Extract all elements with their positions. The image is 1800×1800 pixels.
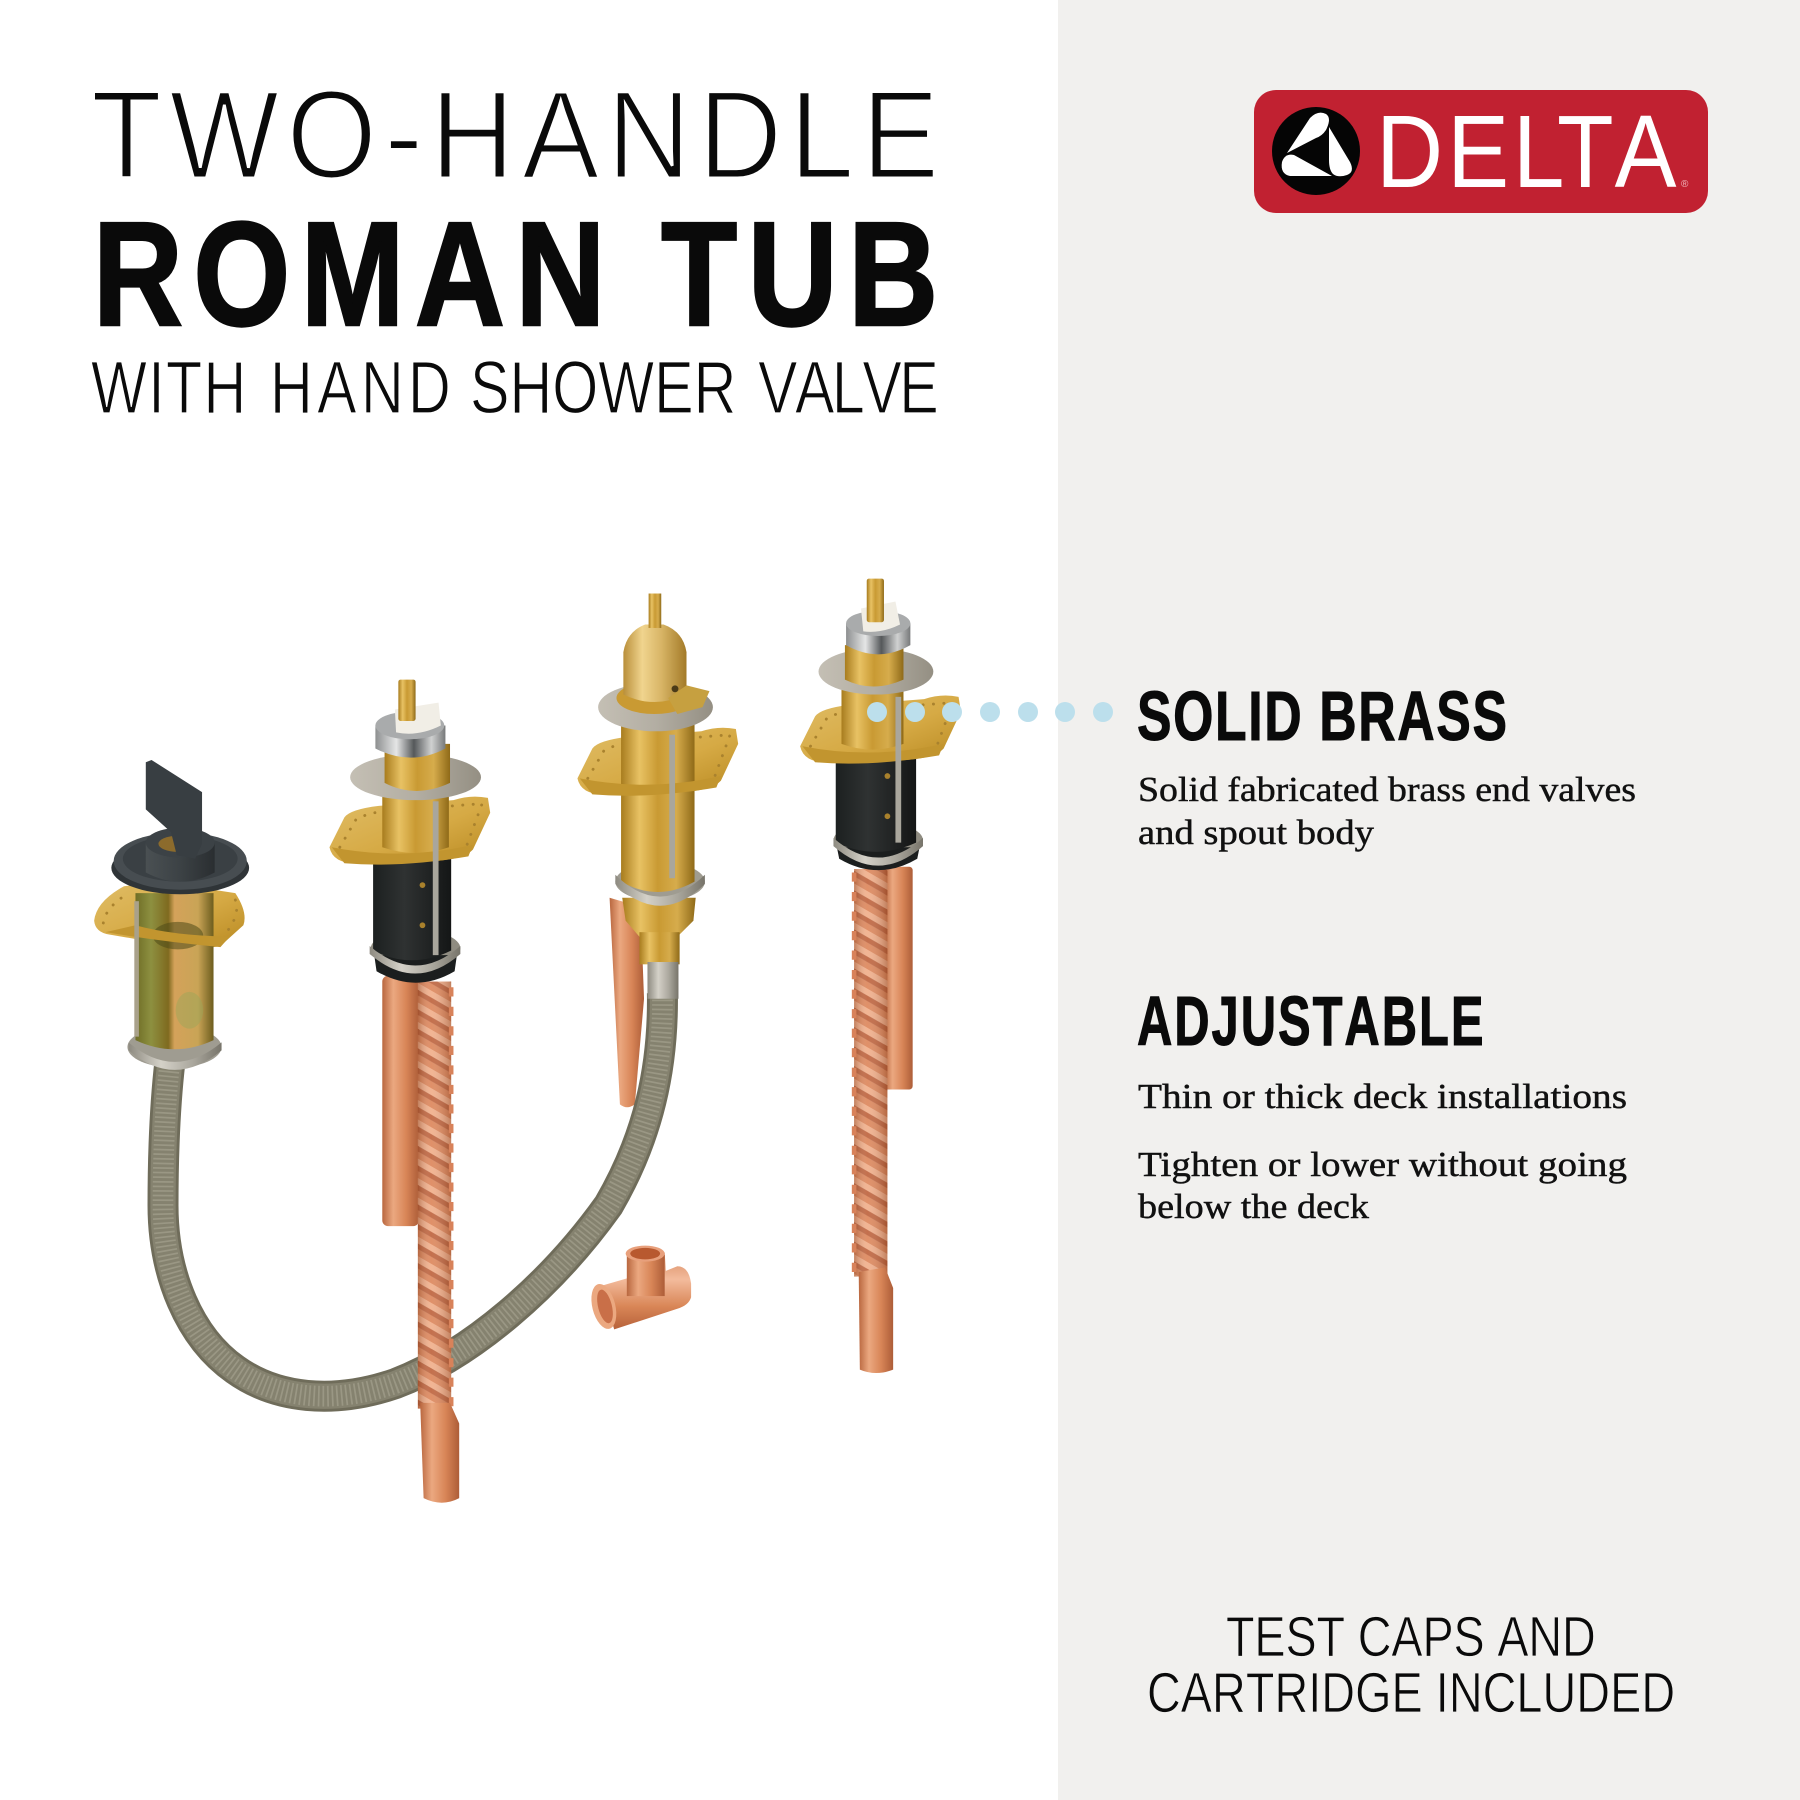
collar front xyxy=(370,946,460,974)
flange lip xyxy=(332,845,473,865)
body text: Thin or thick deck installations xyxy=(1138,1077,1627,1116)
brass pin xyxy=(867,579,884,622)
copper pipe xyxy=(884,867,913,1089)
brass collar xyxy=(616,682,692,714)
hub xyxy=(146,828,215,882)
brass body xyxy=(621,718,695,892)
port dots xyxy=(420,882,425,928)
logo: Delta xyxy=(1254,90,1708,213)
icon: Delta triangle mark xyxy=(1272,107,1360,195)
iridescent body xyxy=(135,893,214,1049)
set screw boss xyxy=(668,685,709,714)
body text: Solid fabricated brass end valves xyxy=(1138,770,1636,809)
collar back xyxy=(615,862,705,901)
copper pipe xyxy=(382,976,419,1226)
black band xyxy=(374,955,457,983)
brass pin xyxy=(649,594,661,628)
logo wordmark: DELTA xyxy=(1376,93,1677,209)
flange lip xyxy=(802,744,944,764)
washer xyxy=(350,754,481,800)
brass dome xyxy=(623,625,687,702)
threaded brass xyxy=(845,645,903,687)
washer xyxy=(819,649,933,695)
handle blade xyxy=(146,760,202,859)
black sleeve xyxy=(836,746,916,852)
feature: adjustable xyxy=(1137,981,1627,1226)
black sleeve xyxy=(373,855,451,960)
body text: Tighten or lower without going xyxy=(1138,1145,1627,1184)
product photo: valve set xyxy=(94,579,961,1503)
flange lip xyxy=(580,776,721,796)
threaded rod xyxy=(669,735,675,878)
body text xyxy=(1138,770,1636,852)
washer xyxy=(598,683,713,731)
feature: solid brass xyxy=(1137,677,1636,852)
title line: WITH HAND SHOWER VALVE: WITH xyxy=(91,347,246,430)
threaded rods xyxy=(134,901,139,1037)
white cartridge xyxy=(395,703,441,734)
body text: and spout body xyxy=(1138,813,1375,852)
brass body xyxy=(841,677,903,750)
footer note: TEST CAPS AND xyxy=(1226,1606,1596,1669)
chrome nut xyxy=(846,611,910,654)
threaded brass xyxy=(385,744,450,791)
brass pin xyxy=(398,680,416,721)
collar back xyxy=(833,822,923,859)
title line: WITH HAND SHOWER VALVE: VALVE xyxy=(758,347,939,430)
collar front xyxy=(833,838,923,866)
flange xyxy=(329,797,490,863)
collar back xyxy=(371,930,460,967)
braided hose xyxy=(163,993,662,1396)
collar front xyxy=(129,1042,222,1070)
body text: below the deck xyxy=(1138,1187,1370,1226)
flange front edge xyxy=(106,925,230,947)
collar front xyxy=(615,875,705,906)
copper tee fitting xyxy=(587,1246,691,1331)
title xyxy=(91,65,939,430)
hose ferrule xyxy=(647,962,678,999)
dark disc xyxy=(111,832,249,894)
chrome nut xyxy=(375,712,445,758)
footer note: CARTRIDGE INCLUDED xyxy=(1147,1662,1675,1725)
brass body xyxy=(382,785,449,853)
panel: right background xyxy=(1058,0,1800,1800)
threaded rod xyxy=(433,801,439,955)
white cartridge xyxy=(861,602,900,632)
callout dots xyxy=(867,702,1113,722)
heading: SOLID BRASS xyxy=(1137,677,1507,756)
title line: WITH HAND SHOWER VALVE: HAND xyxy=(270,347,451,430)
title line: WITH HAND SHOWER VALVE: SHOWER xyxy=(470,347,736,430)
body text xyxy=(1138,1077,1627,1226)
flange xyxy=(577,728,738,794)
twisted copper tube xyxy=(418,982,459,1503)
brass nut xyxy=(639,932,680,964)
title line: ROMAN TUB: ROMAN TUB xyxy=(93,191,938,356)
registered mark: ® xyxy=(1681,179,1689,190)
threaded rod xyxy=(895,697,901,843)
heading: ADJUSTABLE xyxy=(1137,981,1483,1060)
flange xyxy=(94,882,245,947)
title line: WITH HAND SHOWER VALVE xyxy=(91,347,939,430)
twisted copper tube xyxy=(854,869,893,1373)
lower brass fitting xyxy=(622,898,696,937)
center valve copper drop pipe xyxy=(610,898,644,1107)
valve: black diverter handle xyxy=(94,760,249,1070)
footer note xyxy=(1147,1606,1675,1725)
port dots xyxy=(885,773,890,819)
valve: centre hand shower xyxy=(577,594,738,999)
valve: right hot/cold xyxy=(800,579,961,1373)
black band xyxy=(837,847,920,870)
collar back xyxy=(127,1026,222,1068)
valve: left hot/cold xyxy=(329,680,490,1503)
title line: TWO-HANDLE: TWO-HANDLE xyxy=(91,65,939,205)
flange xyxy=(800,696,961,762)
